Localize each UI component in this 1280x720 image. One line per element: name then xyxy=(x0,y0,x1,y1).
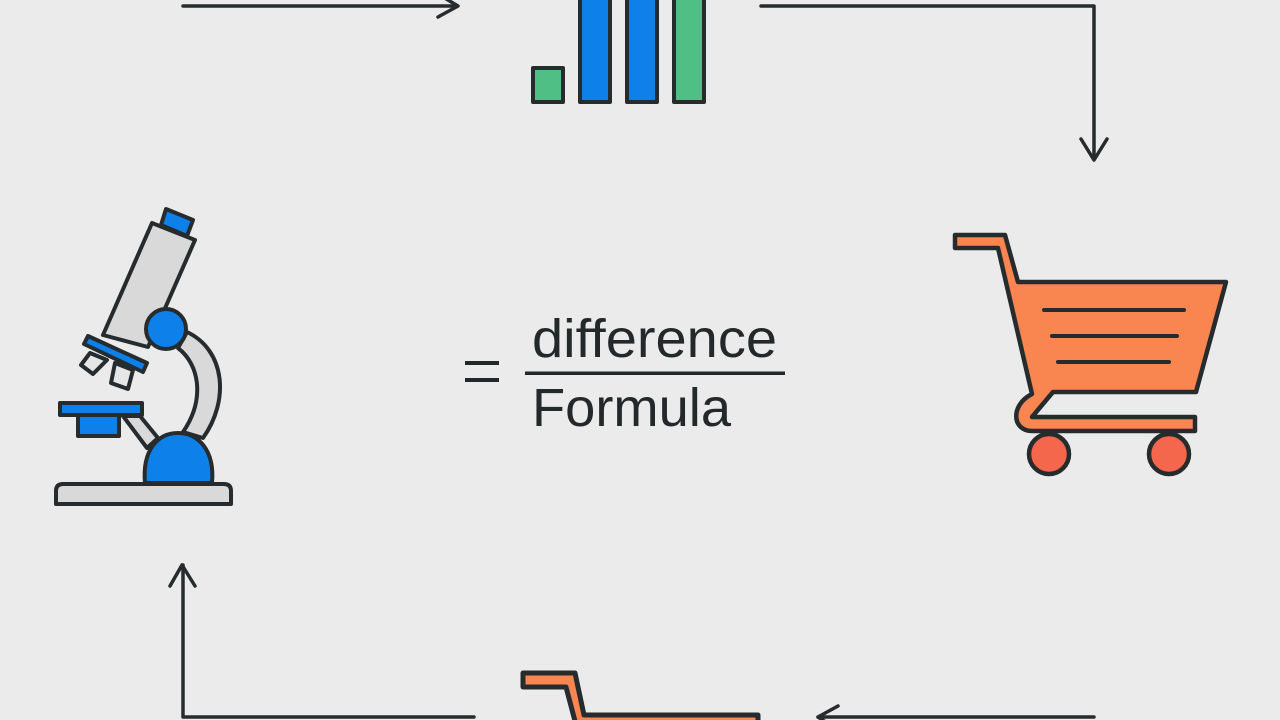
arrow: top left to bar chart xyxy=(183,0,458,17)
arrow: bar chart to cart xyxy=(761,6,1107,160)
icon: shopping cart right xyxy=(955,235,1226,474)
arrow: bottom up to microscope xyxy=(170,565,474,717)
denominator: Formula xyxy=(532,378,732,438)
icon: microscope xyxy=(56,209,231,504)
icon: bar chart xyxy=(533,0,704,102)
icon: shopping cart bottom xyxy=(523,673,758,720)
formula xyxy=(465,309,785,438)
fraction bar xyxy=(525,372,785,375)
numerator: difference xyxy=(532,309,777,369)
arrow: bottom right to bottom cart xyxy=(818,706,1094,720)
equals sign xyxy=(465,363,499,380)
